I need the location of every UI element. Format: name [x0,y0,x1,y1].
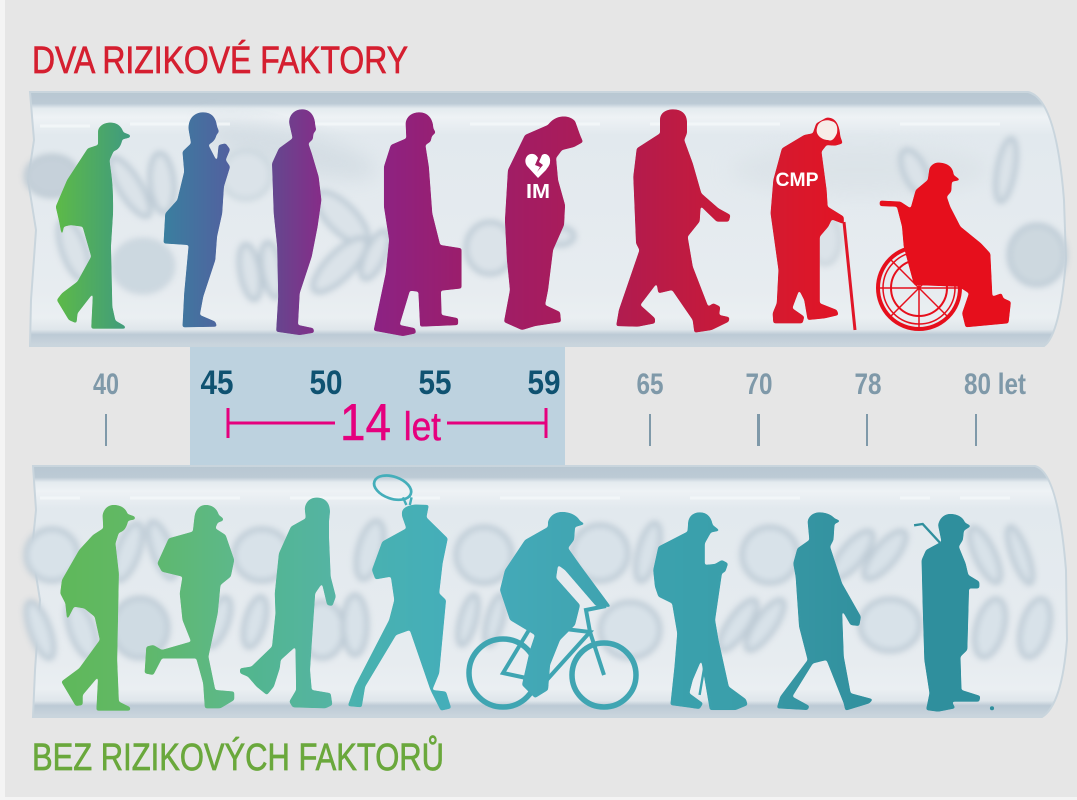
title: bez rizikovych faktoru: BEZ RIZIKOVÝCH FAKTORŮ [32,734,444,779]
wheelchair wheel [878,247,960,329]
blood cells [26,109,1065,301]
highlight streaks [40,496,1010,500]
age 40: 40 [93,368,119,401]
figure: runner [145,505,234,708]
title: dva rizikove faktory: DVA RIZIKOVÉ FAKTORY [32,39,408,82]
label: CMP: CMP [776,170,819,191]
icon: golf club [914,524,940,543]
age 65: 65 [636,368,664,401]
icon: brain [817,120,837,141]
panel: upper artery with risk factors [26,92,1066,346]
artery tube [32,466,1067,717]
figure: man in wheelchair [878,163,1011,329]
highlight streaks [40,124,1000,126]
blood cells [20,518,1056,662]
figure: hiker with trekking pole [653,512,748,710]
icon: tennis racket [371,471,415,505]
figure: elderly man with cane after stroke [771,118,855,330]
figure: cyclist on bicycle [469,512,636,707]
figure: inline skater [240,498,336,708]
bracket: 14 let difference [228,394,546,452]
icon: bicycle [469,606,636,707]
label: IM: IM [526,181,550,203]
panel: age highlight 45 to 59 [190,345,565,467]
figure: walking heavy man [616,109,730,333]
artery tube [28,92,1066,346]
icon: trekking pole [700,573,720,695]
age 55: 55 [418,364,452,402]
age scale [93,364,1026,402]
age 59: 59 [528,364,560,402]
figure: young man with backpack [56,123,130,329]
figure: walking man in shorts [777,512,873,711]
age 70: 70 [746,368,772,401]
label: 14 let: 14 let [340,394,441,452]
age 78: 78 [854,368,882,401]
figure: standing overweight man [272,109,321,335]
age 80 let: 80 let [964,368,1026,401]
panel: lower artery without risk factors [20,466,1067,717]
figure: man with shoulder bag [164,112,230,327]
age 45: 45 [200,364,234,402]
figure: tennis player [348,471,451,711]
figure: young man with backpack [60,505,135,711]
golf ball [990,706,994,710]
icon: cane [844,222,855,330]
figure: man with briefcase [374,112,461,336]
scale ticks [105,414,977,446]
figure: golfer [914,514,994,712]
figure: man with heart attack [504,116,583,330]
age 50: 50 [310,364,342,402]
icon: broken heart [525,154,550,178]
